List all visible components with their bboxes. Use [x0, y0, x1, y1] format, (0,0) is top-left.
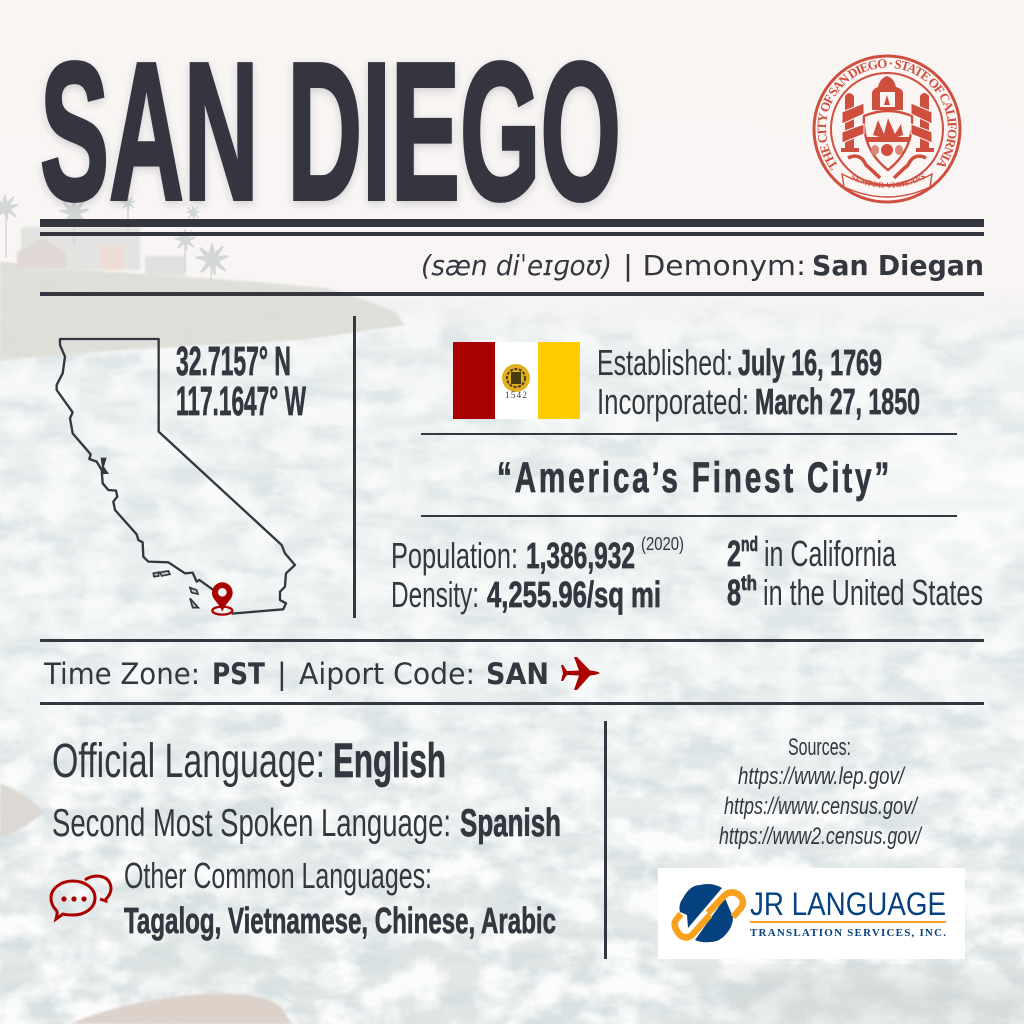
- icon: location pin: [212, 582, 233, 615]
- established dates: [597, 342, 920, 422]
- pronunciation and demonym: San Diegan: [812, 249, 984, 282]
- header rules: [40, 219, 984, 959]
- other languages: Other Common Languages:: [124, 855, 432, 896]
- time zone and airport code: Aiport Code:: [299, 657, 475, 691]
- sources: https://www2.census.gov/: [719, 823, 923, 850]
- population rankings: nd: [741, 534, 758, 556]
- established dates: Incorporated:: [597, 381, 749, 422]
- icon: city flag: [453, 342, 580, 419]
- icon: city seal: THE CITY OF SAN DIEGO · STATE OF CALIFORNIA: [817, 59, 957, 170]
- ornaments: [848, 156, 926, 178]
- population rankings: th: [741, 573, 757, 595]
- shield: [864, 111, 912, 170]
- pronunciation and demonym: [421, 249, 984, 282]
- population and density: (2020): [641, 534, 684, 554]
- white swell: [810, 430, 1024, 570]
- established dates: March 27, 1850: [755, 381, 920, 422]
- established dates: July 16, 1769: [738, 342, 882, 383]
- bottom rock: [70, 994, 292, 1024]
- palm trees: [0, 195, 228, 280]
- population and density: 4,255.96/sq mi: [487, 574, 661, 615]
- motto ribbon: [842, 174, 932, 197]
- population rankings: [727, 533, 983, 613]
- bell tower: [872, 76, 903, 110]
- icon: speech bubbles: [51, 876, 111, 919]
- time zone and airport code: |: [277, 657, 287, 691]
- time zone and airport code: [43, 657, 549, 691]
- population and density: 1,386,932: [526, 535, 635, 576]
- left pillar: [841, 93, 859, 152]
- other languages: [124, 855, 556, 941]
- coordinates: [176, 338, 306, 424]
- headland: [0, 227, 420, 360]
- official language: Official Language:: [52, 735, 325, 788]
- time zone and airport code: SAN: [486, 657, 549, 691]
- logo mark: [675, 884, 743, 942]
- sources: https://www.census.gov/: [724, 793, 919, 820]
- right pillar: [916, 93, 934, 152]
- map of California: [57, 339, 295, 615]
- established dates: Established:: [597, 342, 733, 383]
- sources: Sources:: [788, 734, 851, 761]
- coordinates: 117.1647° W: [176, 378, 306, 424]
- logo: JR Language: JR LANGUAGE: [750, 886, 946, 922]
- icon: city flag: 1542: [505, 390, 527, 400]
- population rankings: 2: [727, 533, 741, 574]
- icon: airplane: [561, 657, 600, 690]
- population rankings: in California: [764, 533, 897, 574]
- logo: JR Language: [658, 868, 965, 959]
- pronunciation and demonym: | Demonym:: [623, 249, 806, 282]
- left rock: [0, 783, 43, 838]
- second language: Spanish: [460, 802, 561, 845]
- other languages: Tagalog, Vietnamese, Chinese, Arabic: [124, 900, 556, 941]
- logo: JR Language: TRANSLATION SERVICES, INC.: [750, 927, 946, 939]
- population and density: [391, 534, 684, 615]
- population rankings: 8: [727, 572, 741, 613]
- sources: https://www.lep.gov/: [738, 763, 906, 790]
- official language: English: [333, 735, 446, 788]
- grey water patches: [130, 930, 250, 990]
- second language: Second Most Spoken Language:: [52, 802, 451, 845]
- time zone and airport code: Time Zone:: [43, 657, 200, 691]
- icon: city seal: SEMPER VIGILANS: [851, 174, 926, 188]
- coordinates: 32.7157° N: [176, 338, 291, 384]
- pronunciation and demonym: (sæn diˈeɪɡoʊ): [421, 249, 612, 282]
- sources: [719, 734, 923, 850]
- population and density: Population:: [391, 535, 518, 576]
- population and density: Density:: [391, 574, 479, 615]
- time zone and airport code: PST: [212, 657, 265, 691]
